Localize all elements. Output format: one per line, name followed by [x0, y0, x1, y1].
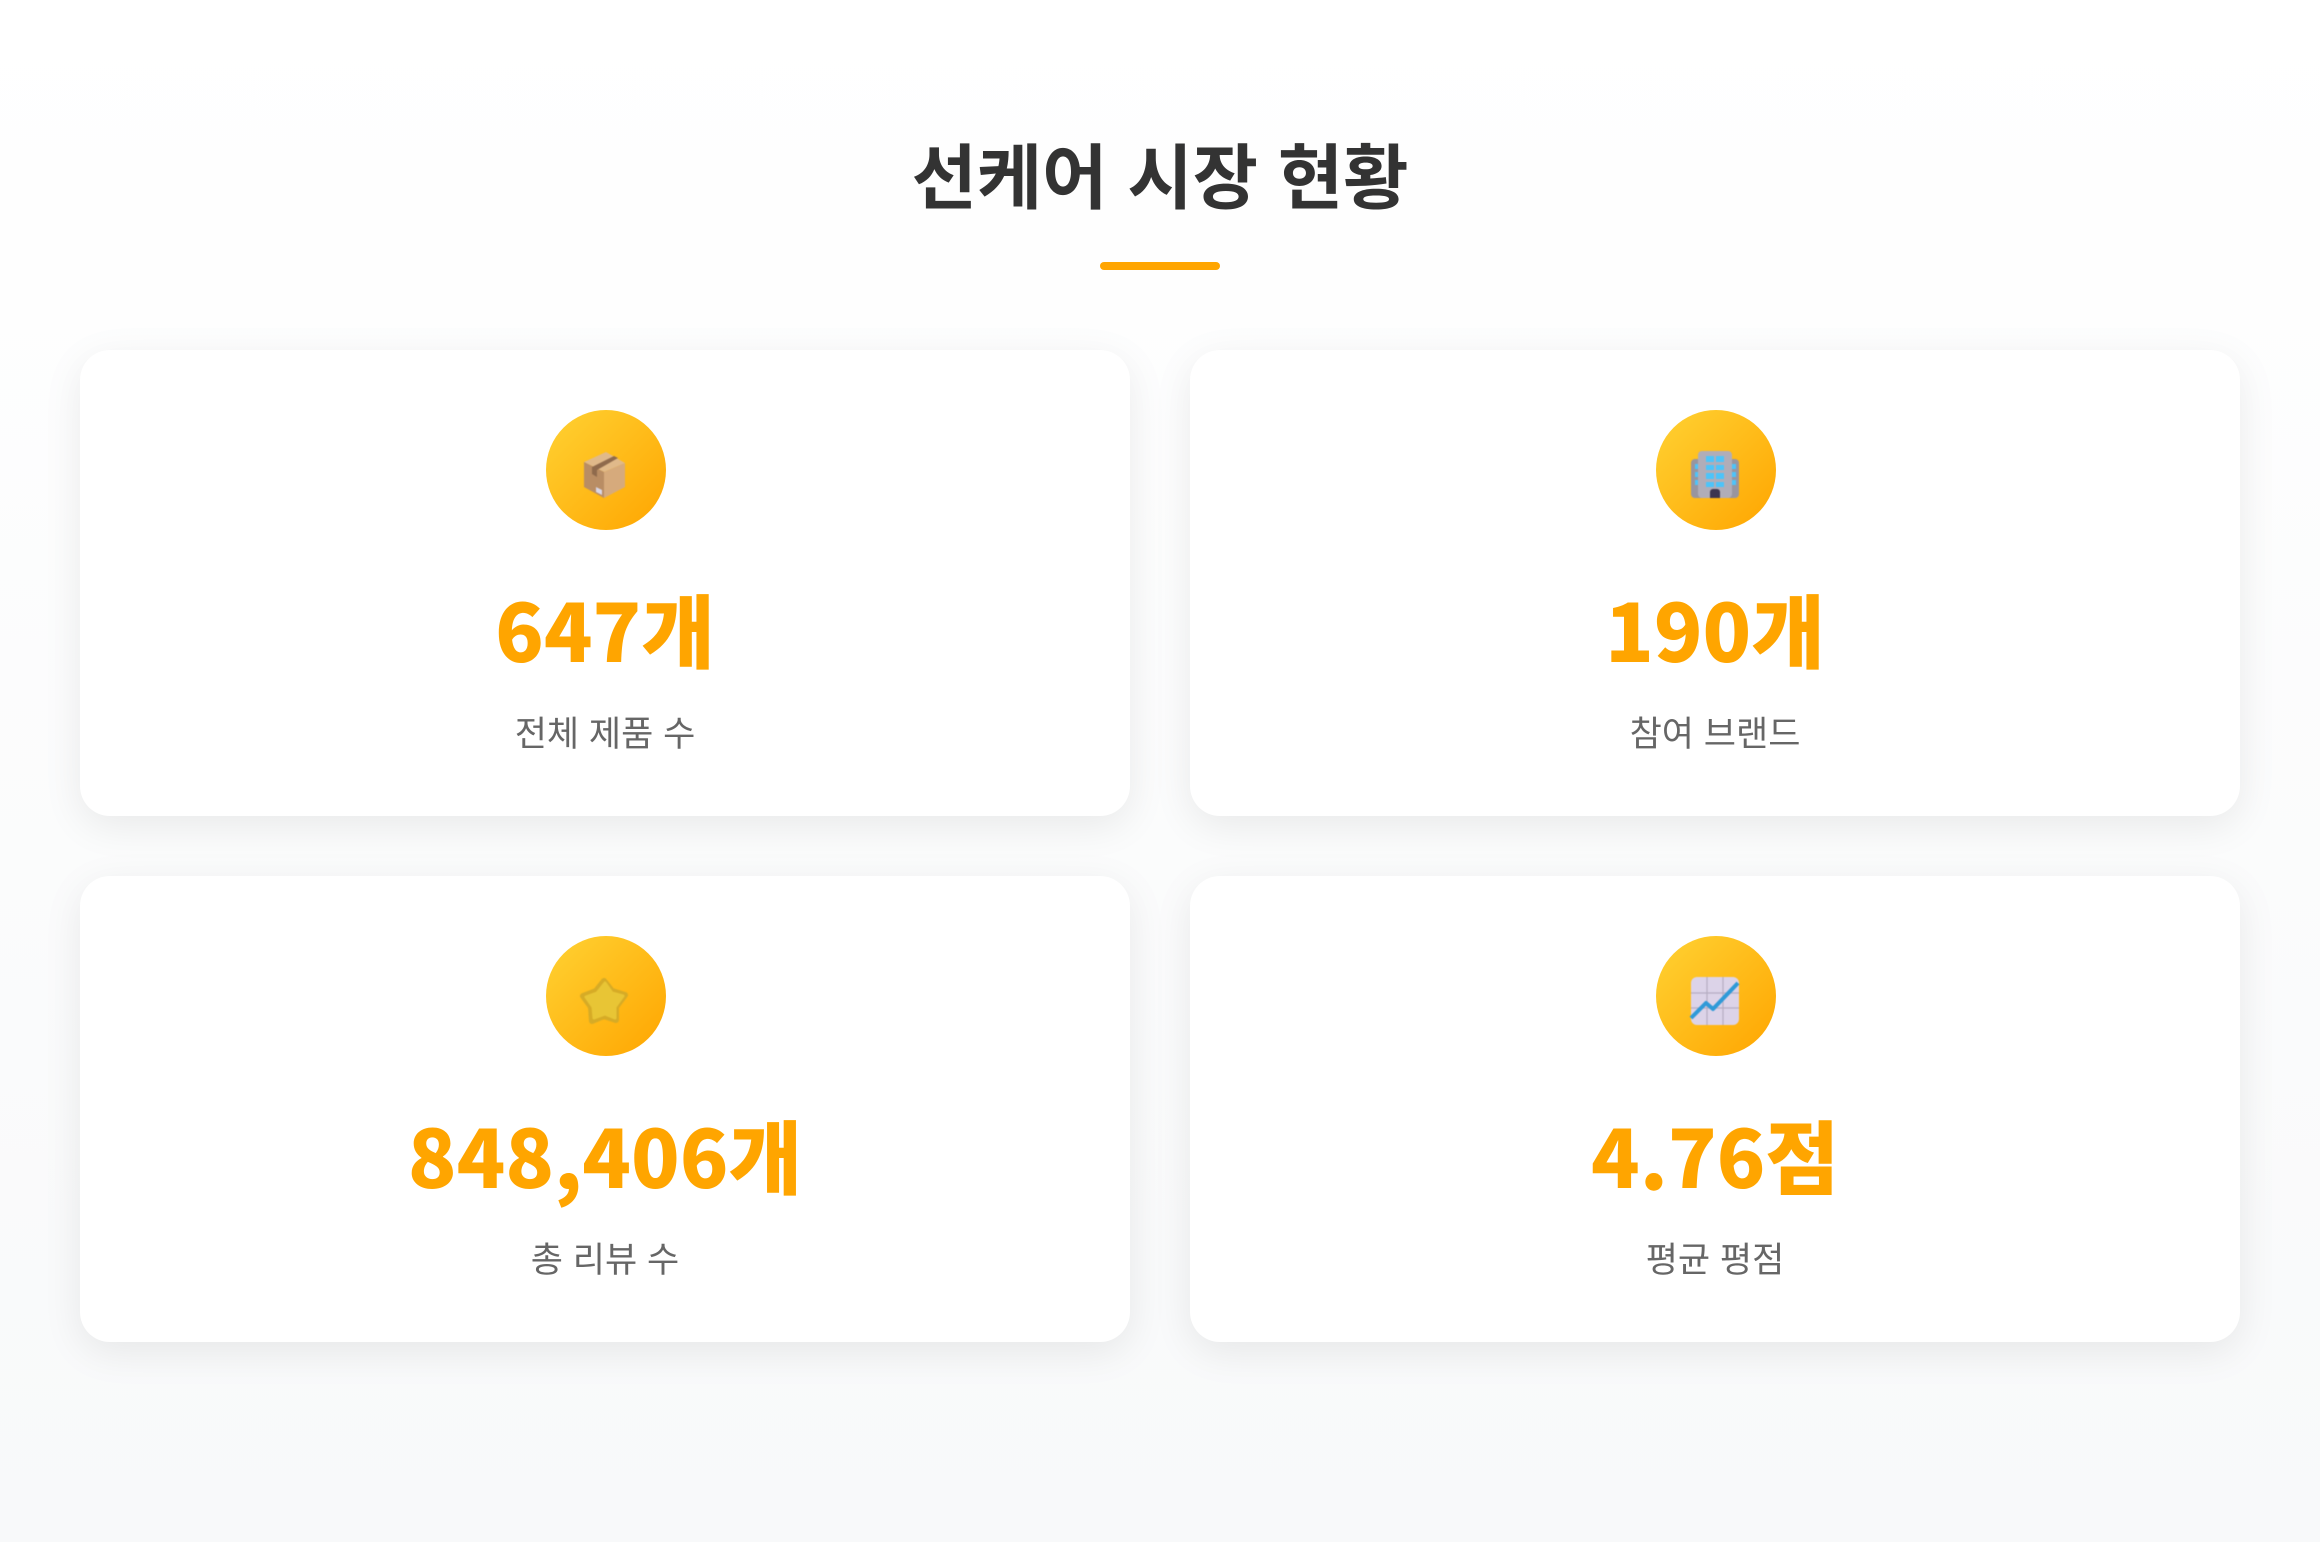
number: 647개 — [495, 570, 715, 686]
title underline — [1100, 262, 1220, 270]
label: 총 리뷰 수 — [531, 1232, 679, 1283]
panel: average rating — [1190, 876, 2240, 1342]
label: 참여 브랜드 — [1630, 706, 1800, 757]
panel: participating brands — [1190, 350, 2240, 816]
label: 전체 제품 수 — [515, 706, 695, 757]
panel: total products — [80, 350, 1130, 816]
icon: package box — [546, 410, 666, 530]
panel: total reviews — [80, 876, 1130, 1342]
number: 848,406개 — [408, 1096, 802, 1212]
icon: office building — [1656, 410, 1776, 530]
number: 190개 — [1605, 570, 1825, 686]
icon: chart with upward trend — [1656, 936, 1776, 1056]
icon: star — [546, 936, 666, 1056]
number: 4.76점 — [1591, 1096, 1839, 1212]
title: 선케어 시장 현황 — [911, 122, 1408, 224]
label: 평균 평점 — [1646, 1232, 1784, 1283]
